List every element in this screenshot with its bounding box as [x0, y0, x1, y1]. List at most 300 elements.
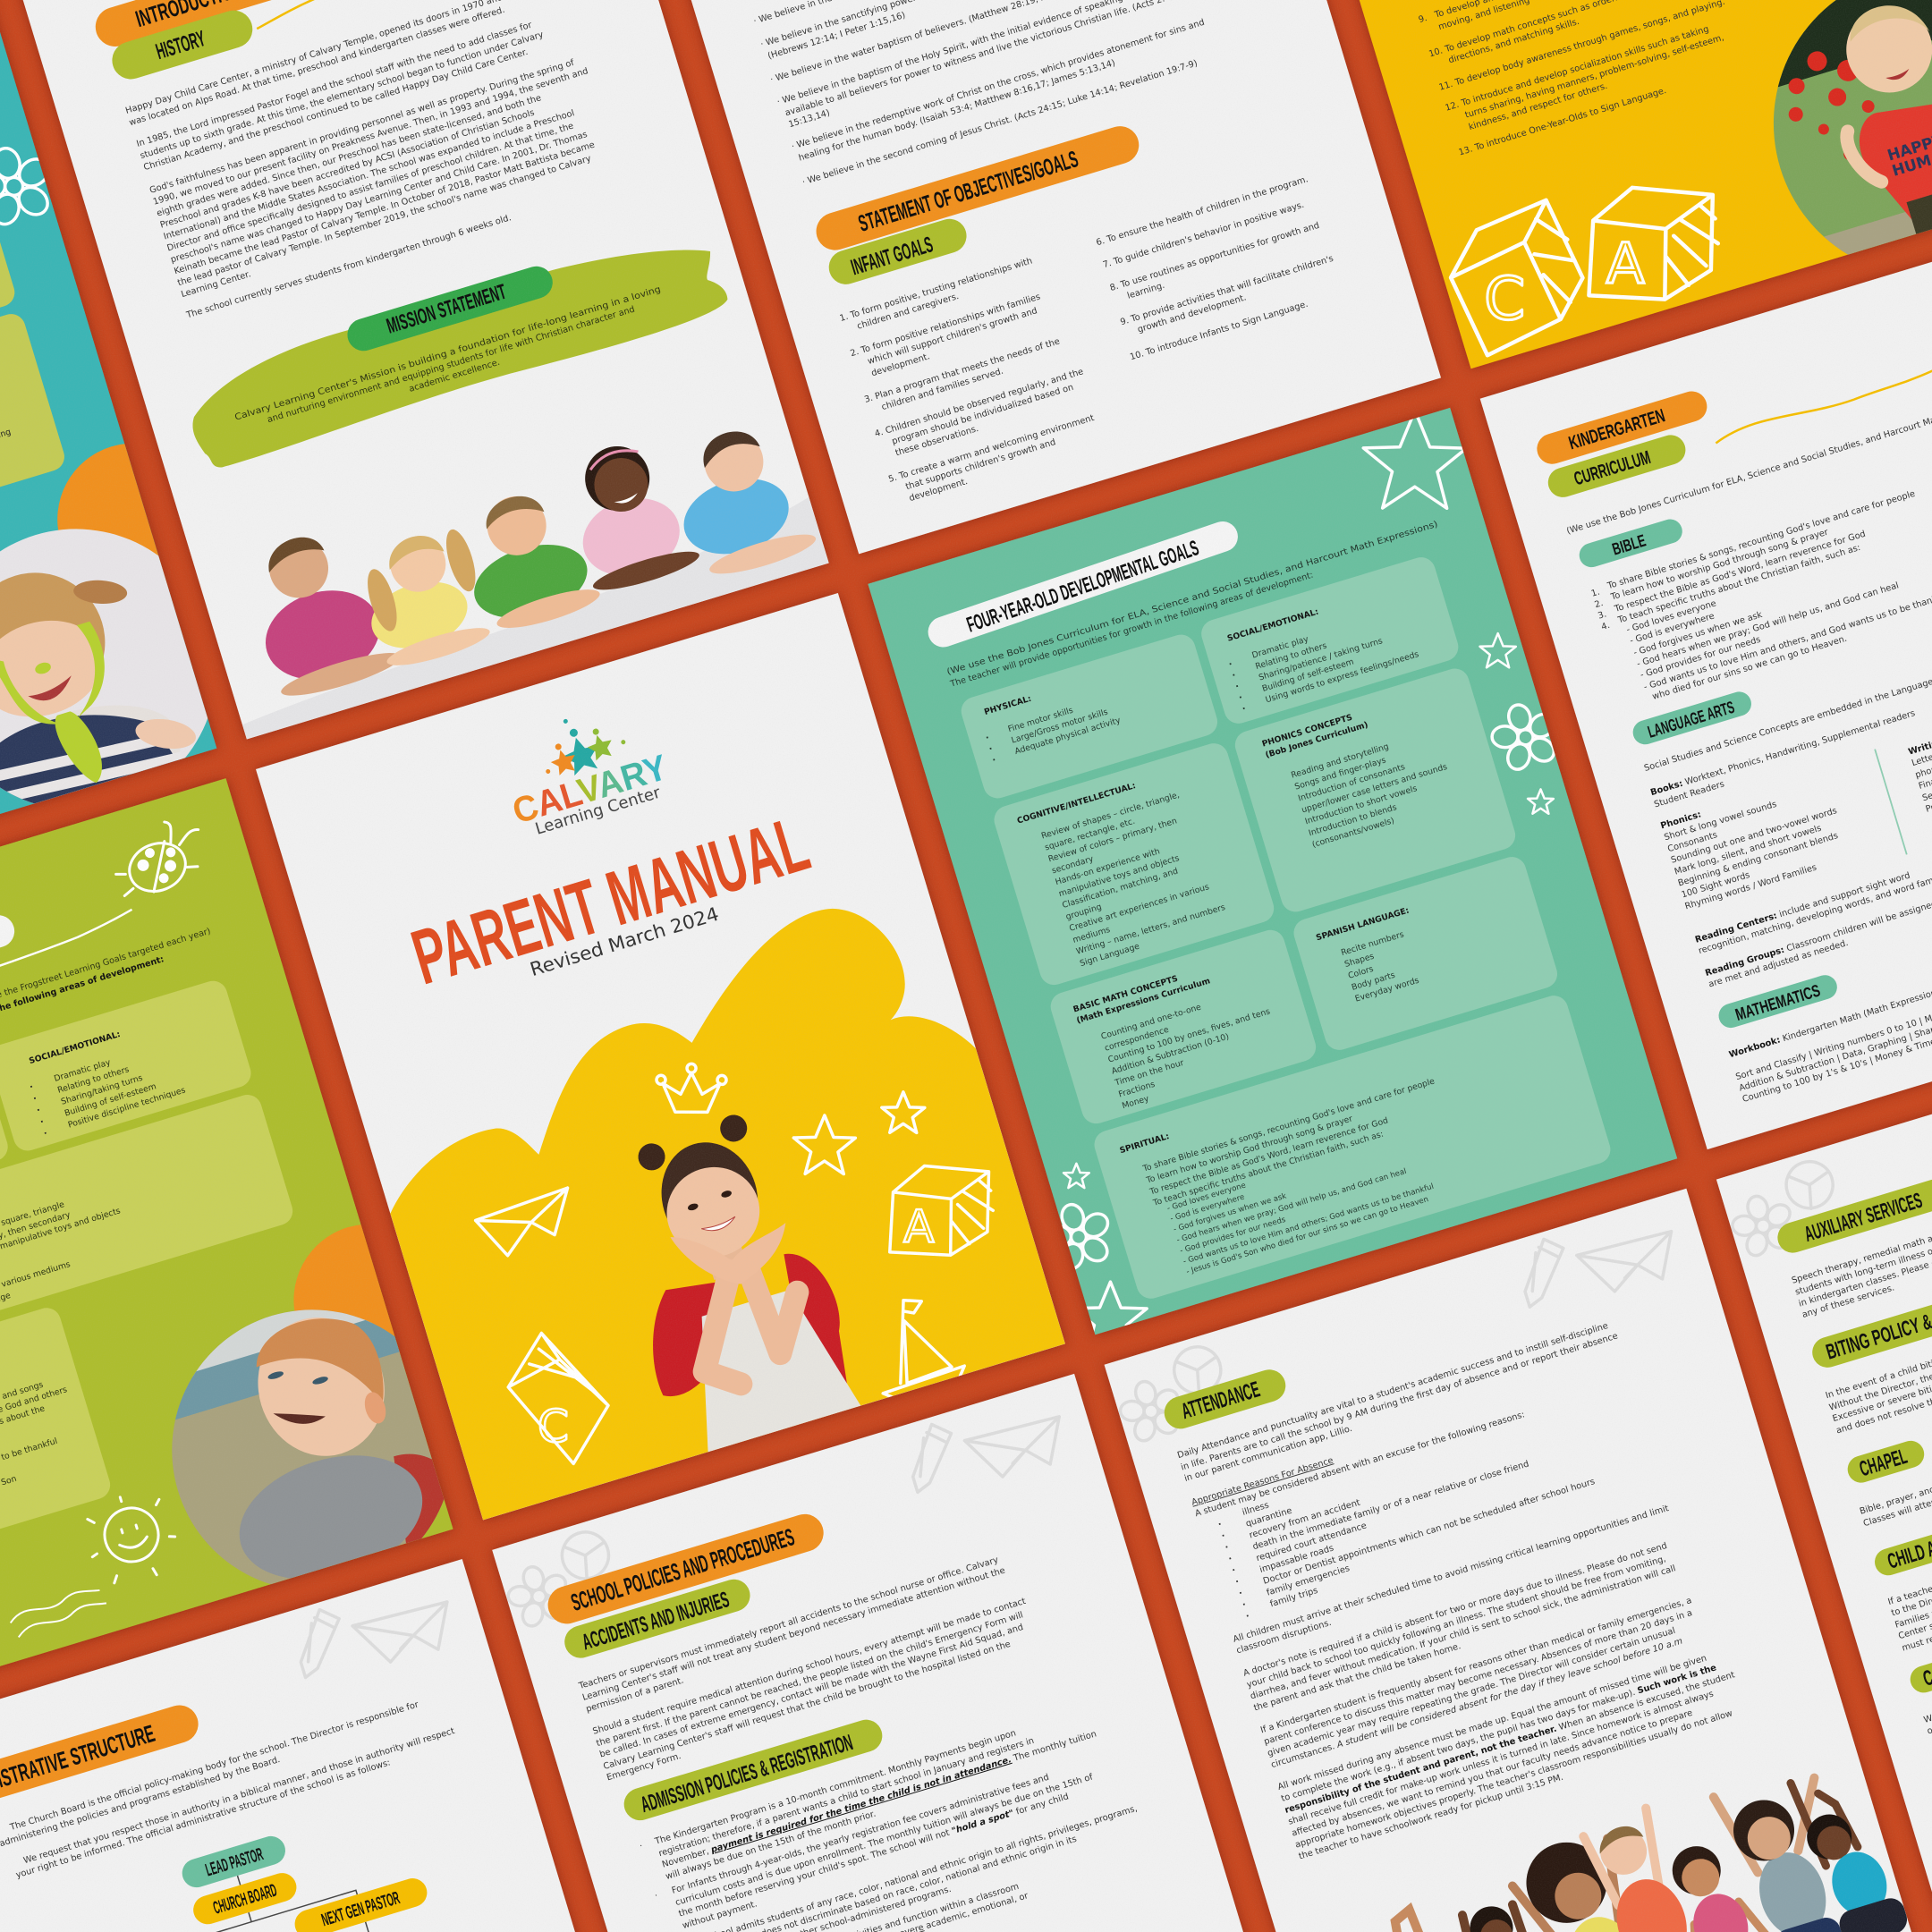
administrative text: your right to be informed. The official administrative structure of the school is as follows: [15, 1758, 392, 1880]
admission list: curriculum costs and is due upon enrollment. The monthly tuition will always be due on the 15th of [674, 1772, 1095, 1908]
history text: Director and office specifically designed to assist families of preschool children. At that time, the [166, 122, 575, 253]
box: phonics: (Bob Jones Curriculum) [1264, 720, 1369, 760]
heading: introduction [90, 0, 292, 51]
admission list: November, payment is required for the time the child is not in attendance. The monthly tuition [661, 1729, 1097, 1870]
box: social emotional: SOCIAL/EMOTIONAL: [28, 1030, 122, 1066]
intro text [945, 520, 1443, 690]
language arts text: Beginning & ending consonant blends [1677, 831, 1839, 889]
box: phonics: Songs and finger-plays [1293, 755, 1387, 792]
goals column two: 8. To use routines as opportunities for growth and [1109, 221, 1321, 293]
language arts text: Rhyming words / Word Families [1684, 862, 1818, 911]
goals column one: children and caregivers. [856, 292, 960, 332]
orange circle [38, 425, 228, 614]
admission list: · [654, 1891, 659, 1902]
panel: four-year-old goals page [837, 382, 1700, 1371]
icon: large star [793, 1115, 855, 1174]
bible list: 1. [1590, 588, 1601, 599]
box: phonics: Introduction of consonants [1297, 762, 1406, 804]
box: spiritual: - God is everywhere [1169, 1193, 1246, 1224]
child one arms [1388, 1909, 1428, 1932]
icon: small star right [1479, 633, 1516, 667]
heading: biting policy [1809, 1272, 1932, 1371]
beliefs list: · We believe in the second coming of Jesus Christ. (Acts 24:15; Luke 14:14; Revelation 19:7-9) [801, 58, 1199, 188]
box: phonics: Introduction to short vowels [1304, 784, 1419, 826]
box: social emotional: Relating to others [56, 1064, 131, 1096]
accidents text: permission of a parent. [585, 1675, 685, 1715]
goals column two [1094, 174, 1345, 362]
heading: auxiliary services [1774, 1175, 1932, 1257]
attendance paragraphs: the parent and ask that the child be taken home. [1253, 1641, 1462, 1713]
attendance intro: Daily Attendance and punctuality are vital to a student's academic success and to instill self-discipline [1176, 1321, 1609, 1461]
accidents text [577, 1551, 1041, 1784]
goals column two: learning. [1126, 281, 1166, 301]
icon: star bottom left [1073, 1282, 1147, 1352]
math text [1728, 976, 1932, 1105]
heading: history [107, 6, 257, 84]
goals column one: 4. Children should be observed regularly, and the [874, 367, 1085, 439]
bible list: To share Bible stories & songs, recounting God's love and care for people [1606, 489, 1916, 591]
panel: administrative structure page [0, 1559, 690, 1932]
box: basic math: BASIC MATH CONCEPTS [1072, 974, 1179, 1014]
bible list: - God hears when we pray; God will help us, and God can heal [1636, 580, 1900, 669]
heading: chapel [1844, 1437, 1928, 1486]
attendance paragraphs: diarrhea, and fever without medication. If your child is sent to school sick, the administration will call [1250, 1563, 1677, 1702]
panel: beliefs and infant goals page [631, 0, 1441, 554]
attendance paragraphs: to complete the work (e.g., if absent two days, the pupil has two days for make-up). Such work is the [1280, 1663, 1718, 1804]
heading: infant goals [825, 215, 970, 289]
bible list: 3. [1597, 609, 1607, 622]
logo tagline: Learning Center [533, 783, 663, 839]
icon: block A [869, 1148, 1009, 1272]
icon: block C [496, 1321, 622, 1475]
box: cognitive: Hands-on experience with [1055, 846, 1161, 887]
org chart [95, 1797, 434, 1932]
bible list: - God provides for our needs [1640, 635, 1762, 681]
photo: child in flower field [1728, 0, 1932, 322]
administrative text [0, 1692, 460, 1883]
heading: objectives [811, 122, 1143, 255]
goals column one: development. [908, 477, 969, 504]
box: social emotional: Using words to express feelings/needs [1265, 649, 1420, 705]
heading: administrative structure [0, 1700, 203, 1816]
heading: objectives: STATEMENT OF OBJECTIVES/GOALS [855, 145, 1081, 237]
section: mathematics: MATHEMATICS [1733, 981, 1823, 1025]
absence reasons: family trips [1269, 1586, 1319, 1609]
language arts text: Books: Worktext, Phonics, Handwriting, Supplemental readers [1649, 708, 1917, 798]
bible list: who died for our sins so we can go to Heaven. [1651, 634, 1848, 702]
panel: school policies page [491, 1374, 1301, 1932]
goals list: kindness, and respect for others. [1468, 81, 1609, 132]
language arts text: Mark long, silent, and short vowels [1674, 824, 1823, 877]
goals column one: children and families served. [880, 367, 1004, 412]
administrative text: The Church Board is the official policy-making body for the school. The Director is responsible for [8, 1699, 420, 1833]
history text: In 1985, the Lord impressed Pastor Fogel and the school staff with the need to add classes for [135, 20, 534, 149]
section: language arts [1630, 689, 1754, 748]
goals column one: that supports children's growth and [904, 437, 1057, 492]
heading: mission statement: MISSION STATEMENT [384, 280, 509, 339]
logo stars [546, 719, 626, 775]
language arts text: Phonics: [1659, 809, 1702, 831]
history text: International) and the Middle States Association. The school was expanded to include a Preschool [163, 108, 576, 242]
absence reasons: family emergencies [1266, 1563, 1351, 1598]
box: cognitive: COGNITIVE/INTELLECTUAL: [1016, 781, 1137, 826]
icon: crown [657, 1063, 726, 1112]
beliefs list: 15:13,14) [787, 108, 831, 130]
icon: tiny star right [1528, 789, 1554, 814]
admission list: For Infants through 4-year-olds, the yearly registration fee covers administrative fees and [671, 1773, 1050, 1896]
box: spanish: SPANISH LANGUAGE: [1315, 906, 1411, 943]
subtitle: Revised March 2024 [528, 903, 721, 980]
administrative text: administering the policies and programs established by the Board. [0, 1755, 281, 1849]
beliefs list: · We believe in the redemptive work of Christ on the cross, which provides atonement for sins and [791, 18, 1206, 152]
administrative text: We request that you respect those in authority in a biblical manner, and those in authority will respect [22, 1726, 456, 1866]
box: physical: Large/Gross motor skills [1010, 708, 1109, 746]
box: basic math: correspondence [1104, 1025, 1170, 1054]
box: phonics: upper/lower case letters and sounds [1301, 762, 1449, 816]
bible list: To learn how to worship God through song & prayer [1609, 527, 1830, 603]
heading: attendance [1160, 1366, 1290, 1433]
admission list: without payment. [682, 1899, 758, 1931]
goals list: 10. [1428, 46, 1444, 59]
goals column one: program should be individualized based on [891, 383, 1075, 446]
yellow accent curve [253, 0, 393, 29]
photo: five children [195, 392, 829, 740]
icon: waves [7, 1585, 108, 1639]
icon: sailboat [859, 1289, 968, 1401]
panel: attendance page [1104, 1189, 1915, 1932]
child three [1504, 1829, 1654, 1932]
absence reasons: Appropriate Reasons For Absence [1191, 1455, 1335, 1508]
heading: mission statement [343, 262, 556, 355]
absence reasons: death in the immediate family or of a near relative or close friend [1251, 1459, 1530, 1552]
panel: green developmental goals page [0, 760, 521, 1733]
heading: conferences [1907, 1626, 1932, 1696]
attendance paragraphs [1232, 1499, 1750, 1862]
box: social emotional: SOCIAL/EMOTIONAL: [1226, 607, 1319, 644]
icon: block A: A [903, 1200, 935, 1253]
box: phonics: Reading and storytelling [1290, 741, 1390, 781]
box: spiritual: - God loves everyone [1166, 1182, 1247, 1214]
admission list: · [639, 1842, 644, 1852]
admission list: the month before reserving your child's spot. The school will not "hold a spot" for any child [678, 1792, 1070, 1919]
box: basic math: Money [1121, 1094, 1150, 1111]
bible list [1589, 488, 1932, 710]
history text: The school currently serves students from kindergarten through 6 weeks old. [184, 213, 513, 321]
language arts text: Short & long vowel sounds [1663, 800, 1778, 843]
heading pill [924, 517, 1241, 651]
heading: curriculum [1545, 431, 1689, 501]
heading: policies: SCHOOL POLICIES AND PROCEDURES [568, 1523, 798, 1616]
box: spiritual: - God provides for our needs [1179, 1216, 1287, 1256]
box: basic math: Counting to 100 by ones, fives, and tens [1107, 1006, 1271, 1065]
gray decorative icons [1106, 1203, 1686, 1450]
history text: Learning Center. [180, 269, 252, 300]
attendance paragraphs: given academic year may require repeating the grade. The Director will consider certain unusual [1267, 1626, 1677, 1758]
box: social emotional: Sharing/taking turns [60, 1073, 144, 1107]
attendance paragraphs: circumstances. A student will be considered absent for the day if they leave school before 10 a.m [1270, 1637, 1683, 1770]
node: lead pastor: LEAD PASTOR [203, 1844, 266, 1880]
box: cognitive: Writing – name, letters, and numbers [1075, 902, 1226, 957]
box: social emotional [0, 978, 254, 1154]
box: cognitive: square, rectangle, etc. [1044, 817, 1136, 853]
box: spanish: Recite numbers [1340, 929, 1405, 958]
heading: kindergarten: KINDERGARTEN [1566, 405, 1667, 453]
box: spanish: Shapes [1343, 952, 1376, 970]
child one [238, 519, 404, 704]
goals list: To introduce One-Year-Olds to Sign Language. [1473, 86, 1667, 153]
reading centers and groups: Reading Centers: include and support sight word [1694, 871, 1911, 945]
box: cognitive: Review of colors – primary, then [1047, 816, 1178, 864]
child two [1458, 1899, 1536, 1932]
section: bible: BIBLE [1610, 531, 1648, 560]
panel: kindergarten curriculum page [1480, 223, 1932, 1149]
icon: flower [0, 137, 65, 236]
reading centers and groups [1694, 853, 1932, 989]
language arts text: Sounding out one and two-vowel words [1670, 806, 1838, 866]
goals column two: 9. To provide activities that will facilitate children's [1119, 254, 1335, 327]
logo [513, 719, 662, 834]
bible list: 4. [1600, 621, 1611, 632]
child four [1580, 1806, 1714, 1932]
reading centers and groups: are met and adjusted as needed. [1707, 938, 1850, 989]
heading: infant goals: INFANT GOALS [848, 232, 936, 280]
goals list: To introduce and develop socialization skills such as taking [1460, 24, 1710, 109]
accidents text: Teachers or supervisors must immediately report all accidents to the school nurse or office. Calvary [577, 1555, 1000, 1691]
attendance paragraphs: All children must arrive at their scheduled time to avoid missing critical learning opportunities and limit [1232, 1504, 1670, 1645]
goals column two: growth and development. [1137, 292, 1248, 335]
intro text: (We use the Bob Jones Curriculum for ELA, Science and Social Studies, and Harcourt Math Expressions) [945, 520, 1439, 677]
box: spiritual: SPIRITUAL: [1119, 1131, 1171, 1156]
box: basic math: Addition & Subtraction (0-10) [1110, 1031, 1230, 1077]
goals column one: 5. To create a warm and welcoming environment [887, 413, 1096, 485]
bible list: To respect the Bible as God's Word, learn reverence for God [1613, 530, 1867, 614]
mission text [233, 284, 669, 445]
history text: students up to sixth grade. At this time, the elementary school began to function under Calvary [139, 30, 545, 161]
admission list: registration; therefore, if a parent wants a child to start school in January and registers in [657, 1736, 1035, 1859]
history text: was located on Alps Road. At that time, preschool and kindergarten classes were offered. [128, 5, 506, 128]
goals column one: which will support children's growth and [867, 306, 1038, 367]
bible list: - God loves everyone [1625, 598, 1717, 635]
bible list: - God is everywhere [1629, 612, 1716, 647]
goals list: 12. [1445, 100, 1461, 114]
section: language arts: LANGUAGE ARTS [1646, 699, 1737, 742]
attendance paragraphs: shall receive full credit for make-up work unless it is turned in late. Since homework is almost always [1287, 1690, 1715, 1827]
goals column one: 2. To form positive relationships with families [849, 292, 1042, 359]
box: phonics: Introduction to blends [1308, 802, 1398, 838]
heading pill [0, 911, 19, 1034]
admission list: The Kindergarten Program is a 10-month commitment. Monthly Payments begin upon [653, 1728, 1017, 1847]
icon: block C [1437, 197, 1597, 359]
icon: small star [882, 1092, 925, 1132]
heading: curriculum: CURRICULUM [1572, 447, 1653, 489]
yellow accent curve [1709, 339, 1932, 443]
attendance paragraphs: responsibility of the student and parent, not the teacher. When an absence is excused, the student [1284, 1670, 1736, 1816]
box: spanish: Body parts [1351, 970, 1396, 993]
box: cognitive [0, 1091, 296, 1364]
absence reasons [1191, 1385, 1604, 1624]
box: spiritual: To teach specific truths about the Christian faith, such as: [1151, 1130, 1385, 1208]
heading: kindergarten [1533, 387, 1711, 468]
red flowers [1771, 24, 1916, 174]
child five [661, 417, 819, 585]
box: physical [0, 1051, 12, 1226]
box: spanish: Everyday words [1354, 976, 1420, 1004]
section: bible [1576, 516, 1685, 570]
box: spanish [1291, 853, 1561, 1054]
box: spiritual [0, 1304, 114, 1564]
goals list: 11. [1438, 80, 1454, 93]
intro text: The teacher will provide opportunities for growth in the following areas of development: [948, 571, 1315, 690]
floor shadow [227, 497, 829, 740]
language arts text [1642, 656, 1932, 911]
box: basic math: Fractions [1117, 1080, 1157, 1099]
history text [123, 0, 623, 321]
box: spiritual: - God wants us to love Him and others; God wants us to be thankful [1182, 1182, 1435, 1267]
attendance paragraphs: your child back to school too quickly following an illness. The student should be free from vomiting, [1246, 1554, 1667, 1690]
panel: history and mission page [20, 0, 829, 740]
icon: sun [78, 1486, 184, 1591]
attendance paragraphs: If a Kindergarten student is frequently absent for reasons other than medical or family emergencies, a [1259, 1596, 1693, 1735]
admission list: will always be due on the 15th of the month prior. [665, 1809, 877, 1882]
icon: flower left [1036, 1195, 1122, 1279]
language arts text: Student Readers [1653, 779, 1725, 809]
box: social emotional: Sharing/patience / taking turns [1258, 636, 1384, 682]
child abuse text [1887, 1521, 1932, 1654]
goals column one: development. [870, 352, 931, 378]
history text: Preschool and grades K-8 have been accredited by ACSI (Association of Christian Schools [159, 108, 536, 231]
box: social emotional: Positive discipline techniques [67, 1085, 187, 1131]
panel: yellow one-year-old goals page [1243, 0, 1932, 423]
box: social emotional: Dramatic play [1250, 634, 1310, 661]
connectors [103, 1844, 369, 1932]
auxiliary text: any of these services. [1801, 1283, 1895, 1320]
title: PARENT MANUAL [402, 800, 818, 1001]
box: phonics: (consonants/vowels) [1311, 816, 1395, 850]
heading: accidents [561, 1575, 754, 1662]
box: spiritual: To respect the Bible as God's Word, learn reverence for God [1148, 1115, 1389, 1198]
mission text: academic excellence. [408, 358, 501, 394]
heading: admission: ADMISSION POLICIES & REGISTRATION [638, 1730, 856, 1818]
beliefs list [751, 0, 1216, 188]
accidents text: the parent first. If the parent cannot be reached, the people listed on the child's Emergency Form will [595, 1610, 1024, 1749]
icon: ladybug [105, 811, 215, 904]
box: spiritual: - God forgives us when we ask [1173, 1191, 1288, 1234]
intro text [0, 927, 216, 1089]
goals list: directions, and matching skills. [1447, 17, 1580, 65]
absence reasons: required court attendance [1255, 1521, 1368, 1563]
history text: 1990, we moved to our present facility on Preakness Avenue. Then, in 1993 and 1994, the seventh and [152, 66, 589, 208]
attendance paragraphs: A doctor's note is required if a child is absent for two or more days due to illness. Please do not send [1242, 1541, 1668, 1679]
history text: preschool's name was changed to Happy Day Learning Center and Child Care. In 2001, Dr. Thomas [170, 130, 589, 265]
history text: Christian Academy, and the preschool continued to be called Happy Day Child Care Center. [142, 47, 530, 173]
math text: Counting to 100 by 1's & 10's | Money & Time [1741, 1037, 1932, 1105]
heading: policies [543, 1510, 828, 1629]
box: cognitive: manipulative toys and objects [1057, 853, 1181, 899]
photo: child [590, 1102, 868, 1462]
absence reasons: quarantine [1244, 1506, 1293, 1530]
box: cognitive: mediums [1072, 925, 1112, 945]
photo: smiling baby [128, 1265, 496, 1632]
icon: flower right [1482, 695, 1569, 779]
heading: accidents: ACCIDENTS AND INJURIES [580, 1587, 732, 1655]
heading: attendance: ATTENDANCE [1179, 1377, 1263, 1424]
accidents text: Calvary Learning Center's staff will request that the child be brought to the hospital listed on the [602, 1640, 1012, 1772]
box: social emotional: Relating to others [1254, 640, 1328, 672]
attendance paragraphs: affected by absences, we want to remind you that our faculty needs advance notice to prepare [1291, 1708, 1694, 1839]
box: physical: PHYSICAL: [983, 694, 1032, 717]
box: physical: Adequate physical activity [1013, 716, 1123, 757]
photo: children with raised arms [1379, 1745, 1915, 1932]
divider [1875, 750, 1907, 854]
node: lead pastor [179, 1833, 289, 1891]
orange circle [275, 1206, 464, 1395]
box: phonics [1232, 665, 1519, 915]
box: phonics: PHONICS CONCEPTS [1261, 713, 1353, 750]
absence reasons: Doctor or Dentist appointments which can not be scheduled after school hours [1262, 1477, 1596, 1587]
box: physical [958, 631, 1221, 801]
box: social emotional [1198, 554, 1462, 727]
gray decorative icons [0, 1573, 462, 1820]
panel: teal goals page [0, 0, 285, 953]
box: social emotional: Dramatic play [53, 1057, 112, 1084]
mission text: and nurturing environment and equipping students for life with Christian character and [267, 304, 636, 425]
box: spiritual: To share Bible stories & songs, recounting God's love and care for people [1141, 1076, 1436, 1174]
box: spiritual [1091, 992, 1614, 1302]
box: upper goals [0, 197, 18, 374]
absence reasons: A student may be considered absent with an excuse for the following reasons: [1194, 1410, 1526, 1519]
absence reasons: illness [1241, 1500, 1270, 1518]
box: lower goals [0, 310, 68, 610]
mission blob [178, 222, 733, 472]
accidents text: Emergency Form. [606, 1751, 682, 1783]
child four [555, 431, 702, 597]
bible list: To teach specific truths about the Christian faith, such as: [1616, 543, 1861, 626]
icon: large star top [1363, 411, 1467, 508]
box: cognitive: Review of shapes – circle, triangle, [1040, 790, 1181, 841]
absence reasons: impassable roads [1258, 1544, 1335, 1575]
language arts text: 100 Sight words [1681, 870, 1751, 900]
box: spanish: Colors [1347, 964, 1375, 981]
child two [350, 522, 497, 674]
attendance paragraphs: parent conference to discuss this matter may become necessary. Absences of more than 20 days in a [1263, 1608, 1693, 1747]
attendance intro: in life. Parents are to call the school by 9 AM during the first day of absence and or report their absence [1180, 1331, 1619, 1473]
bible list: 2. [1594, 598, 1605, 610]
box: cognitive: Sign Language [1079, 941, 1141, 969]
history text: Keinath became the lead Pastor of Calvary Temple. In October of 2018, Pastor Matt Battista became [173, 140, 596, 276]
icon: block A: A [1606, 231, 1645, 296]
gray decorative icons [494, 1388, 1074, 1635]
mission text: Calvary Learning Center's Mission is building a foundation for life-long learning in a loving [233, 284, 662, 423]
goals list: 13. [1458, 144, 1474, 158]
goals column two: 6. To ensure the health of children in the program. [1095, 174, 1309, 248]
goals column one [839, 251, 1106, 508]
heading: history: HISTORY [153, 26, 208, 64]
panel: auxiliary services page [1716, 1004, 1932, 1930]
icon: paper plane [474, 1188, 581, 1261]
box: cognitive: Classification, matching, and [1061, 866, 1179, 911]
box: basic math: Time on the hour [1113, 1058, 1185, 1089]
box: spiritual: To learn how to worship God through song & prayer [1144, 1114, 1354, 1186]
node: next gen pastor [292, 1875, 430, 1932]
box: basic math: Counting and one-to-one [1100, 1002, 1203, 1042]
attendance paragraphs: All work missed during any absence must be made up. Equal the amount of missed time will be given [1276, 1653, 1707, 1792]
box: cognitive [991, 740, 1277, 988]
goals column one: these observations. [894, 424, 979, 458]
box: basic math [1047, 927, 1319, 1127]
box: cognitive: Creative art experiences in various [1068, 882, 1210, 934]
node: church board [190, 1869, 300, 1928]
attendance paragraphs: the teacher to have schoolwork ready for pickup until 3:15 PM. [1298, 1773, 1564, 1862]
